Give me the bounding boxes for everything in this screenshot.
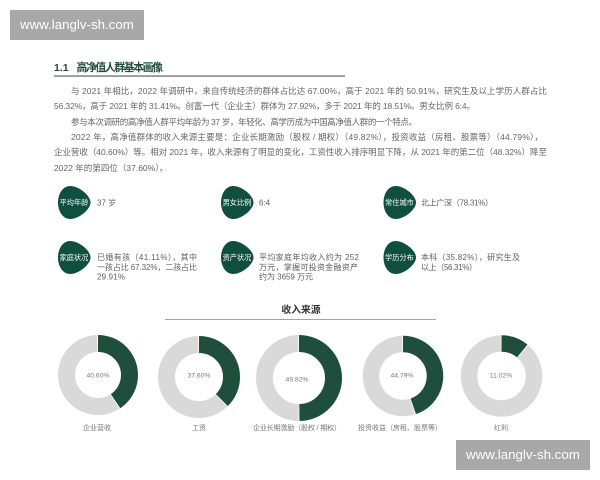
donut chart: salary 37.60%: 37.60% <box>187 372 211 380</box>
watermark: bottom right <box>456 440 590 470</box>
body text: 2022 年，高净值群体的收入来源主要是：企业长期激励（股权 / 期权）（49.82%），投资收益（房租、股票等）（44.79%）， <box>71 132 543 142</box>
body text: 参与本次调研的高净值人群平均年龄为 37 岁，年轻化、高学历成为中国高净值人群的一个特点。 <box>71 117 417 127</box>
chart heading: income sources: 收入来源 <box>281 303 321 316</box>
card: asset status: 约为 3659 万元 <box>259 272 313 282</box>
card: average age <box>58 186 116 219</box>
card: education distribution: 以上（56.31%） <box>421 263 477 272</box>
donut chart: investment income 44.79%: 44.79% <box>390 372 414 380</box>
donut chart: long-term incentives 49.82%: 49.82% <box>285 376 309 384</box>
card: city of residence <box>384 186 493 219</box>
donut chart: business revenue 40.60% <box>66 344 130 432</box>
card: family status: 29.91% <box>97 272 125 282</box>
section heading: 1.1 <box>54 62 69 74</box>
card: family status: 家庭状况 <box>60 253 88 262</box>
card: average age: 37 岁 <box>97 198 116 208</box>
card: city of residence: 常住城市 <box>385 198 414 207</box>
card: education distribution: 学历分布 <box>385 253 414 262</box>
card: asset status: 资产状况 <box>223 253 251 262</box>
donut chart: business revenue 40.60%: 企业营收 <box>83 423 111 432</box>
section heading <box>54 60 345 77</box>
card: average age: 平均年龄 <box>60 198 88 207</box>
donut chart: business revenue 40.60%: 40.60% <box>86 372 110 380</box>
donut chart: dividends 11.02%: 红利 <box>494 423 508 432</box>
card: asset status <box>221 241 360 282</box>
donut chart: salary 37.60% <box>166 344 232 432</box>
card: education distribution: 本科（35.82%），研究生及 <box>421 252 520 262</box>
card: asset status: 万元，掌握可投资金融资产 <box>259 262 358 272</box>
body text: 56.32%，高于 2021 年的 31.41%。创富一代（企业主）群体为 27.92%，多于 2021 年的 18.51%。男女比例 6:4。 <box>54 101 475 111</box>
card: city of residence: 北上广深（78.31%） <box>421 198 493 208</box>
donut chart: long-term incentives 49.82% <box>253 344 341 432</box>
card: asset status: 平均家庭年均收入约为 252 <box>259 252 360 262</box>
donut chart: salary 37.60%: 工资 <box>192 423 206 432</box>
body text: 2022 年的第四位（37.60%）。 <box>54 163 168 173</box>
donut chart: dividends 11.02%: 11.02% <box>490 372 512 380</box>
card: gender ratio: 男女比例 <box>223 198 251 207</box>
watermark: top left: www.langlv-sh.com <box>19 17 134 32</box>
card: education distribution <box>384 241 520 274</box>
watermark: bottom right: www.langlv-sh.com <box>465 447 580 462</box>
body text <box>54 86 547 173</box>
body text: 企业营收（40.60%）等。相对 2021 年，收入来源有了明显的变化，工资性收入排序明显下降，从 2021 年的第二位（48.32%）降至 <box>54 147 547 157</box>
body text: 与 2021 年相比，2022 年调研中，来自传统经济的群体占比达 67.00%，高于 2021 年的 50.91%，研究生及以上学历人群占比 <box>71 86 547 96</box>
card: gender ratio: 6:4 <box>259 198 271 208</box>
donut chart: long-term incentives 49.82%: 企业长期激励（股权 / 期权） <box>253 423 341 432</box>
card: family status: 一孩占比 67.32%，二孩占比 <box>97 262 197 272</box>
donut chart: investment income 44.79%: 投资收益（房租、股票等） <box>358 423 442 432</box>
card: family status <box>58 241 197 282</box>
card: gender ratio <box>221 186 271 219</box>
card: family status: 已婚有孩（41.11%），其中 <box>97 252 197 262</box>
watermark: top left <box>10 10 144 40</box>
section heading: 高净值人群基本画像 <box>76 60 163 74</box>
donut chart: investment income 44.79% <box>358 344 442 432</box>
donut chart: dividends 11.02% <box>469 344 534 432</box>
